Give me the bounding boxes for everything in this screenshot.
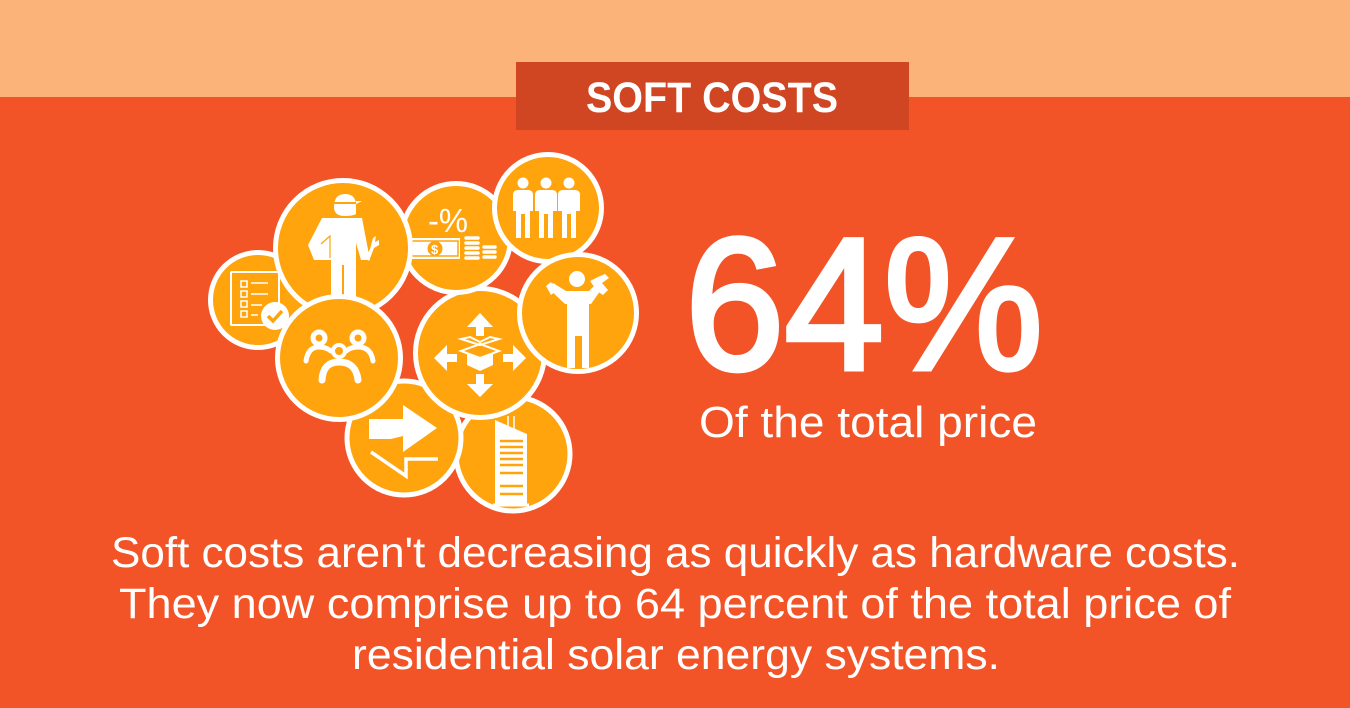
statistic caption: Of the total price — [699, 398, 1037, 447]
icon: discount and money: -% — [428, 202, 468, 239]
heading: soft costs: SOFT COSTS — [586, 74, 838, 122]
body text: Soft costs aren't decreasing as quickly as hardware costs. — [111, 529, 1240, 577]
icon: worker with hard hat — [276, 180, 410, 316]
icon: group of people — [278, 296, 400, 420]
icon: building — [456, 397, 570, 511]
body text: residential solar energy systems. — [352, 631, 1000, 679]
icon: box with arrows — [416, 288, 544, 418]
statistic: 64%: 64% — [685, 199, 1043, 409]
icon: discount and money — [402, 184, 510, 292]
icon: checklist — [210, 252, 306, 348]
icon: arrow exchange — [347, 381, 461, 495]
heading: soft costs — [516, 62, 909, 130]
icon cluster — [210, 154, 636, 511]
body text: They now comprise up to 64 percent of the total price of — [119, 580, 1232, 628]
icon: team of three — [494, 154, 602, 262]
icon: technician with wrench — [520, 254, 636, 372]
top band — [0, 0, 1350, 97]
body text — [111, 529, 1240, 679]
icon: discount and money: $ — [431, 242, 439, 257]
